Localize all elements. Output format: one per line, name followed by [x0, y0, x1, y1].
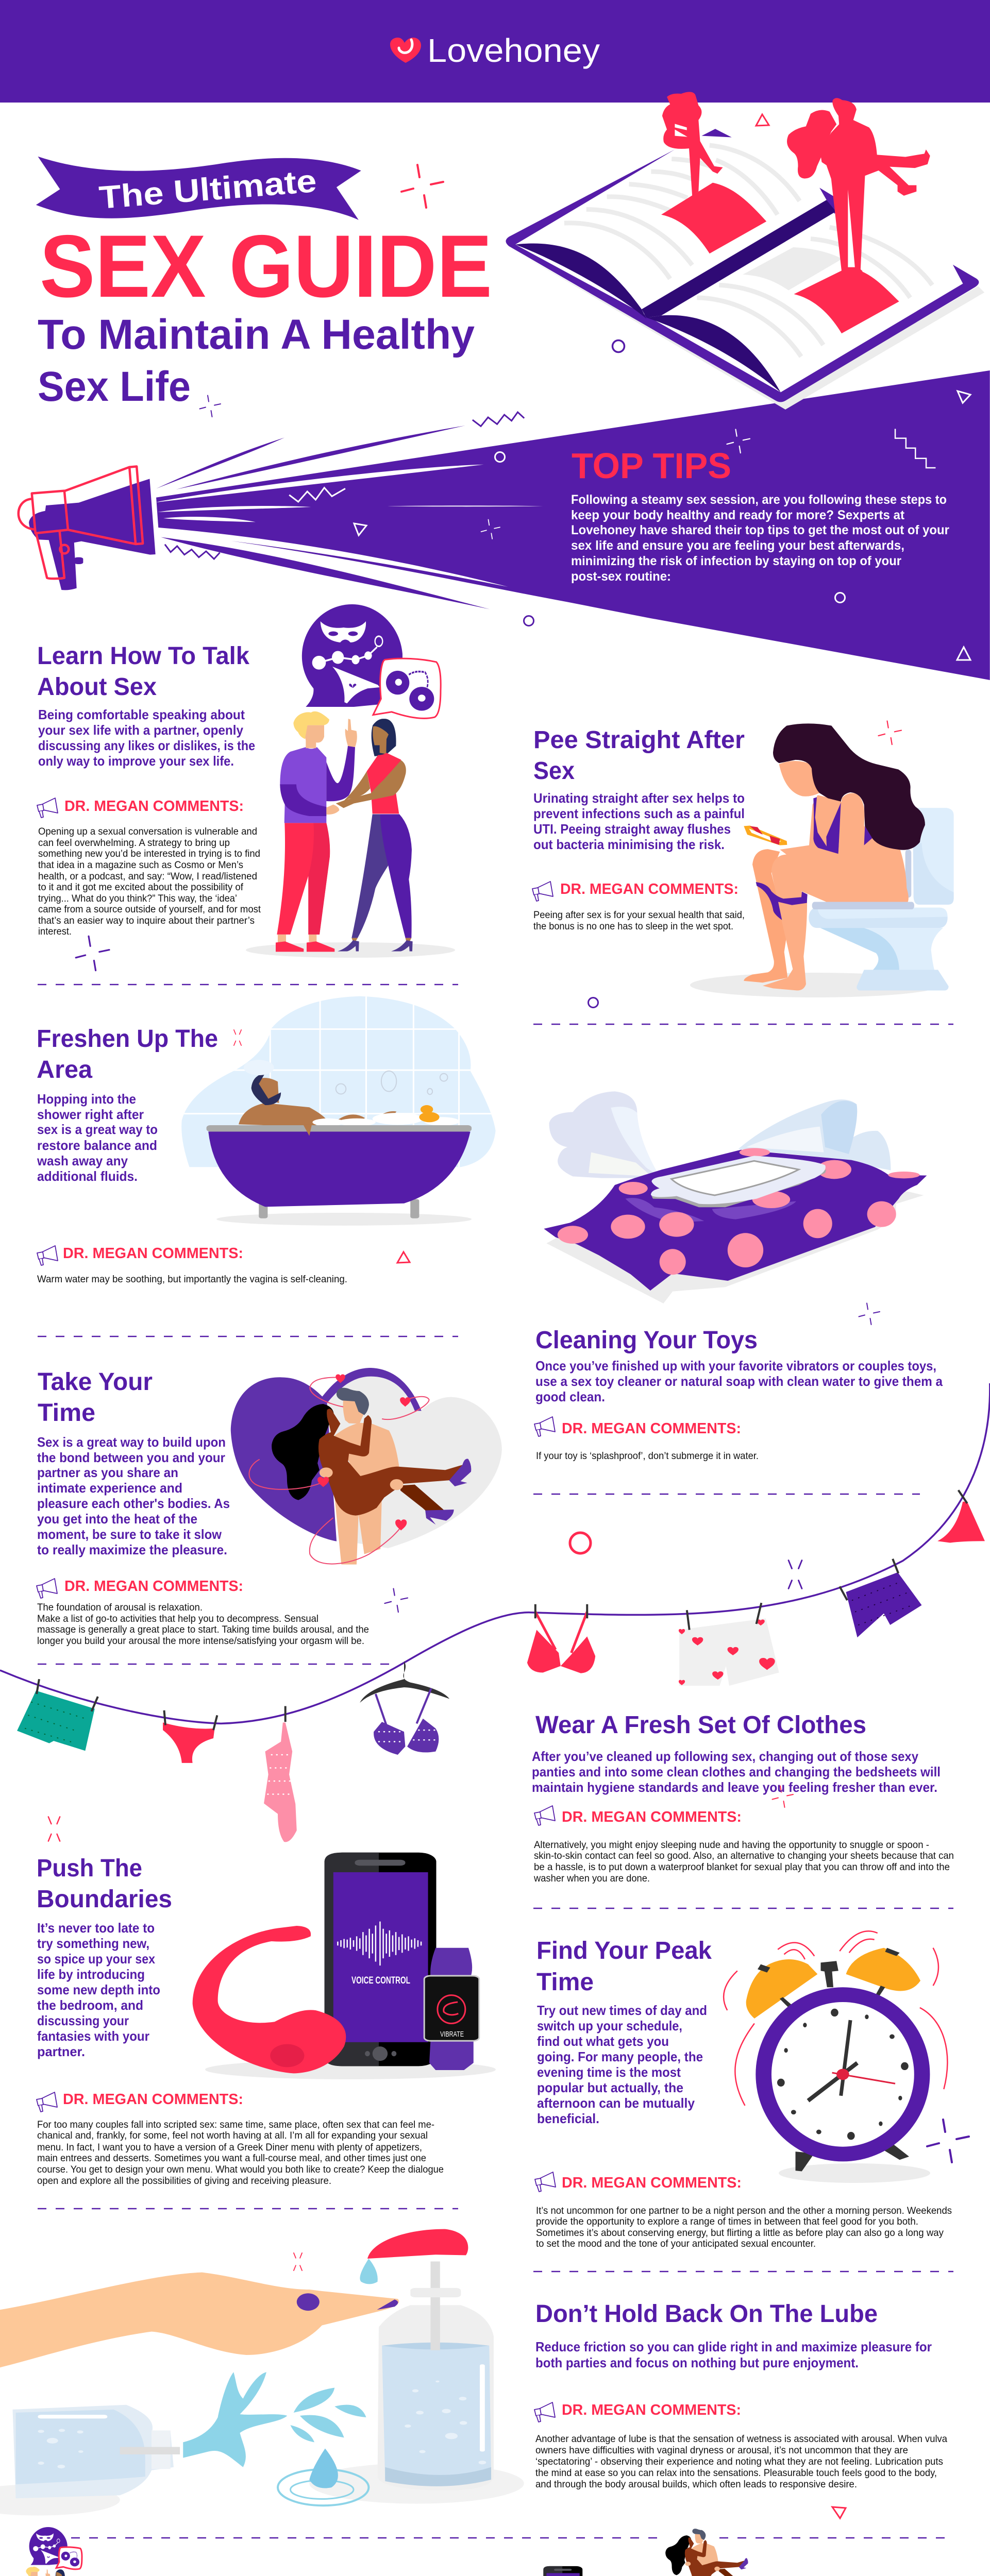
- body text: restore balance and: [37, 1138, 157, 1153]
- body text: good clean.: [535, 1389, 605, 1404]
- body text: [533, 790, 745, 852]
- comment text: It’s not uncommon for one partner to be a night person and the other a morning person. Weekends: [536, 2205, 952, 2216]
- bells: [746, 1948, 920, 2019]
- body text: Try out new times of day and: [537, 2003, 707, 2018]
- illustration: man in bathtub: [207, 1060, 472, 1218]
- body text: pleasure each other's bodies. As: [37, 1496, 230, 1511]
- body text: some new depth into: [37, 1982, 160, 1997]
- comment text: Make a list of go-to activities that help you to decompress. Sensual: [37, 1613, 318, 1624]
- body text: Being comfortable speaking about: [38, 707, 245, 722]
- sparkle: [859, 1303, 880, 1325]
- dr megan comments heading: DR. MEGAN COMMENTS:: [562, 2402, 741, 2418]
- illustration: talking couple: [276, 604, 441, 952]
- body text: you get into the heat of the: [37, 1511, 197, 1527]
- comment text: [38, 826, 261, 937]
- illustration: alarm clock: [724, 1931, 947, 2172]
- heading: Cleaning Your Toys: [535, 1327, 758, 1354]
- fallen bottle: [12, 2405, 180, 2498]
- teal shorts: [17, 1679, 98, 1751]
- body text: UTI. Peeing straight away flushes: [533, 821, 731, 837]
- red panty: [163, 1710, 217, 1763]
- ribbon banner: [36, 157, 361, 220]
- washing line: [0, 1383, 990, 1723]
- phone: [325, 1853, 436, 2066]
- clock hands: [808, 2020, 895, 2100]
- subtitle line 2: Sex Life: [38, 363, 191, 410]
- comment text: Opening up a sexual conversation is vulnerable and: [38, 826, 257, 837]
- red threads with hearts: [249, 1375, 429, 1564]
- comment text: ‘spectatoring’ - observing their experience and noting what they are not feeling. Lubrication puts: [535, 2456, 943, 2467]
- divider: [38, 1664, 395, 1665]
- body text: [532, 1749, 941, 1795]
- dr megan comments heading: DR. MEGAN COMMENTS:: [562, 2175, 742, 2191]
- heading: Boundaries: [37, 1886, 172, 1913]
- comment text: and through the body arousal builds, which often leads to responsive desire.: [535, 2479, 857, 2490]
- illustration: tiled wall blob: [177, 994, 505, 1226]
- heading: Time: [536, 1969, 594, 1996]
- dr megan comments heading: [37, 2091, 243, 2112]
- body text: partner as you share an: [37, 1465, 178, 1480]
- body text: beneficial.: [537, 2111, 599, 2126]
- divider: [533, 1024, 953, 1025]
- body text: Reduce friction so you can glide right in and maximize pleasure for: [535, 2339, 932, 2354]
- polka dots: [558, 1148, 920, 1275]
- top tips body: post-sex routine:: [571, 569, 671, 584]
- dr megan comments heading: DR. MEGAN COMMENTS:: [64, 798, 244, 815]
- splash: [183, 2372, 366, 2467]
- mini: toy and phone: [497, 2566, 597, 2576]
- comment text: For too many couples fall into scripted sex: same time, same place, often sex that can feel me-: [37, 2119, 434, 2130]
- comment text: interest.: [38, 926, 72, 937]
- comment text: the bonus is no one has to sleep in the wet spot.: [533, 921, 733, 932]
- body text: switch up your schedule,: [537, 2018, 682, 2033]
- body text: life by introducing: [37, 1967, 145, 1982]
- body text: sex is a great way to: [37, 1122, 158, 1137]
- heading: Take Your: [38, 1368, 153, 1396]
- book: [506, 129, 984, 410]
- pack: [544, 1091, 927, 1291]
- body text: popular but actually, the: [537, 2080, 683, 2095]
- divider: [38, 984, 458, 985]
- illustration: hearts background: [231, 1368, 502, 1548]
- body text: It’s never too late to: [37, 1920, 155, 1936]
- comment text: Alternatively, you might enjoy sleeping nude and having the opportunity to snuggle or spoon -: [534, 1839, 929, 1851]
- lid: [651, 1156, 827, 1207]
- body text: use a sex toy cleaner or natural soap with clean water to give them a: [535, 1374, 943, 1389]
- section: cleaning your toys: [534, 1303, 943, 1462]
- header band: [0, 0, 990, 103]
- illustration: wet wipes pack: [544, 1091, 927, 1303]
- body text: discussing your: [37, 2013, 129, 2028]
- dr megan comments heading: DR. MEGAN COMMENTS:: [562, 1809, 742, 1825]
- tick marks: [777, 2009, 909, 2140]
- top tips body: minimizing the risk of infection by staying on top of your: [571, 554, 901, 568]
- comment text: [536, 2205, 952, 2249]
- title block: [36, 157, 492, 410]
- comment text: The foundation of arousal is relaxation.: [37, 1602, 203, 1613]
- foam: [312, 1113, 460, 1126]
- sparkle: [76, 936, 109, 971]
- legs: [796, 2142, 909, 2172]
- heading: [533, 726, 745, 785]
- comment text: [37, 1602, 369, 1647]
- right panty: [937, 1490, 985, 1543]
- comment text: can feel overwhelming. A strategy to bring up: [38, 837, 230, 849]
- droplet and ripples: [278, 2448, 368, 2505]
- ringing arcs: [724, 1931, 947, 2106]
- body text: try something new,: [37, 1936, 149, 1951]
- comment text: menu. In fact, I want you to have a version of a Greek Diner menu with plenty of appetizers,: [37, 2142, 422, 2153]
- comment text: [37, 2119, 444, 2187]
- tissues: [549, 1091, 891, 1178]
- body text: so spice up your sex: [37, 1951, 155, 1967]
- top tips body: Lovehoney have shared their top tips to get the most out of your: [571, 523, 949, 537]
- comment text: washer when you are done.: [533, 1873, 650, 1884]
- body text: only way to improve your sex life.: [38, 753, 234, 769]
- heading: [38, 1368, 153, 1427]
- shadow: [246, 942, 455, 958]
- divider: [38, 1336, 458, 1337]
- heading: Don’t Hold Back On The Lube: [535, 2300, 878, 2328]
- body text: maintain hygiene standards and leave you feeling fresher than ever.: [532, 1780, 937, 1795]
- top tips body: Following a steamy sex session, are you following these steps to: [571, 493, 947, 507]
- comment text: health, or a podcast, and say: “Wow, I read/listened: [38, 871, 257, 882]
- sparkle: [384, 1588, 408, 1612]
- icon: rubber duck: [419, 1105, 440, 1122]
- sparkle: [927, 2120, 969, 2162]
- heading: Time: [38, 1399, 95, 1427]
- dr megan comments heading: [532, 881, 739, 901]
- body text: your sex life with a partner, openly: [38, 722, 244, 738]
- upright pump bottle: [360, 2229, 494, 2490]
- body text: Urinating straight after sex helps to: [533, 790, 745, 806]
- clock body: [756, 1987, 930, 2161]
- decorative marks: [234, 1030, 410, 1263]
- divider: [533, 1494, 920, 1495]
- heading: [37, 1855, 172, 1913]
- body text: Hopping into the: [37, 1091, 136, 1107]
- section: find your peak time: [535, 1931, 969, 2249]
- mini: talking couple: [19, 2527, 82, 2576]
- man: [239, 1060, 396, 1135]
- dr megan comments heading: DR. MEGAN COMMENTS:: [562, 1420, 741, 1437]
- purple bra on hanger: [360, 1661, 449, 1755]
- section: push the boundaries: [37, 1817, 496, 2187]
- comment text: open and explore all the possibilities of giving and receiving pleasure.: [37, 2175, 331, 2187]
- body text: find out what gets you: [537, 2033, 669, 2049]
- top tips heading: TOP TIPS: [572, 446, 731, 486]
- divider: [71, 2537, 946, 2538]
- sparkle: [48, 1817, 60, 1841]
- shadows: [0, 2463, 524, 2516]
- sparkle: [294, 2253, 302, 2270]
- icon: heart logo: [390, 38, 421, 63]
- woman: [744, 723, 925, 991]
- body text: afternoon can be mutually: [537, 2095, 695, 2111]
- comment text: Warm water may be soothing, but importantly the vagina is self-cleaning.: [37, 1274, 347, 1285]
- decorative marks around clothesline: [570, 1533, 802, 1807]
- body text: the bond between you and your: [37, 1450, 225, 1465]
- phone screen label: VOICE CONTROL: [351, 1975, 410, 1986]
- body text: shower right after: [37, 1107, 144, 1122]
- title: the ultimate: The Ultimate: [98, 163, 318, 216]
- man: [276, 711, 357, 952]
- woman: [336, 719, 413, 951]
- comment text: that’s an easier way to inquire about their partner’s: [38, 915, 255, 926]
- divider: [533, 1908, 953, 1909]
- body text: [37, 1920, 160, 2059]
- section: freshen up the area: [37, 994, 505, 1285]
- dr megan comments heading: DR. MEGAN COMMENTS:: [560, 881, 739, 897]
- body text: the bedroom, and: [37, 1997, 143, 2013]
- megaphone beam panel: [19, 370, 990, 680]
- purple shorts: [840, 1559, 921, 1637]
- man: [334, 1388, 399, 1565]
- dr megan comments heading: DR. MEGAN COMMENTS:: [63, 2091, 243, 2108]
- divider: [533, 2271, 953, 2272]
- body text: additional fluids.: [37, 1168, 138, 1184]
- comment text: owners have difficulties with vaginal dryness or arousal, it’s not uncommon that they are: [535, 2445, 908, 2456]
- illustration: embracing couple: [272, 1388, 471, 1565]
- body text: [37, 1434, 230, 1557]
- watch label: VIBRATE: [440, 2030, 464, 2039]
- watch: [424, 1948, 479, 2070]
- body text: [535, 1358, 943, 1404]
- beam: [156, 370, 990, 680]
- comment text: Another advantage of lube is that the sensation of wetness is associated with arousal. When vulva: [535, 2433, 947, 2445]
- red bra: [527, 1604, 595, 1673]
- heading: Push The: [37, 1855, 142, 1882]
- comment text: Sometimes it’s about conserving energy, but flirting a little as before play can also go a long way: [536, 2227, 944, 2239]
- heading: [536, 1937, 712, 1996]
- sparkle and ring: [589, 721, 901, 1008]
- toilet: [809, 808, 954, 991]
- body text: [537, 2003, 707, 2126]
- shadow: [205, 2060, 496, 2079]
- wrapper: [544, 1150, 927, 1291]
- body text: panties and into some clean clothes and changing the bedsheets will: [532, 1764, 941, 1780]
- footer panel: [0, 2527, 990, 2576]
- pink slip: [264, 1706, 297, 1842]
- top tips body: [571, 493, 949, 584]
- heading: Wear A Fresh Set Of Clothes: [535, 1711, 866, 1739]
- heading: [37, 642, 249, 701]
- comment text: course. You get to design your own menu. What would you both like to create? Keep the dialogue: [37, 2164, 444, 2175]
- comment text: [533, 909, 745, 932]
- decorative marks top: [200, 114, 769, 417]
- shadow: [546, 1175, 924, 1303]
- icon: megaphone: [19, 466, 156, 590]
- heading: Find Your Peak: [536, 1937, 712, 1964]
- mini: embracing couple: [665, 2529, 748, 2576]
- comment text: provide the opportunity to explore a range of times in between that feel good for you both.: [536, 2216, 918, 2227]
- top tips body: sex life and ensure you are feeling your best afterwards,: [571, 538, 904, 553]
- comment text: longer you build your arousal the more intense/satisfying your orgasm will be.: [37, 1635, 364, 1647]
- heading: [37, 1025, 218, 1083]
- body text: After you’ve cleaned up following sex, changing out of those sexy: [532, 1749, 918, 1764]
- heading: Learn How To Talk: [37, 642, 249, 670]
- comment text: something new you’d be interested in trying is to find: [38, 848, 260, 859]
- illustration: clothesline: [0, 1383, 990, 1842]
- section: don't hold back on the lube: [534, 2300, 947, 2518]
- shadow: [690, 973, 941, 997]
- triangle: [832, 2507, 846, 2518]
- heading: Sex: [533, 757, 575, 785]
- body text: intimate experience and: [37, 1480, 182, 1496]
- comment text: skin-to-skin contact can feel so good. Also, an alternative to changing your sheets because that can: [534, 1850, 954, 1861]
- heart boxers: [679, 1603, 779, 1686]
- body text: partner.: [37, 2044, 85, 2059]
- dr megan comments heading: DR. MEGAN COMMENTS:: [63, 1245, 243, 1262]
- comment text: to it and it got me excited about the possibility of: [38, 882, 244, 893]
- shadow: [779, 2163, 930, 2183]
- body text: [535, 2339, 932, 2370]
- comment text: massage is generally a great place to start. Taking time builds arousal, and the: [37, 1624, 369, 1635]
- section: wear a fresh set of clothes: [532, 1711, 954, 1884]
- heading: Freshen Up The: [37, 1025, 218, 1053]
- illustration: woman on toilet: [744, 723, 954, 991]
- brand name: Lovehoney: [427, 32, 600, 69]
- toy: [193, 1926, 346, 2073]
- illustration: phone, watch and toy: [193, 1853, 479, 2073]
- bubbles: [336, 1071, 448, 1094]
- comment text: main entrees and desserts. Sometimes you want a full-course meal, and other times just one: [37, 2153, 426, 2164]
- section: pee straight after sex: [532, 721, 954, 1008]
- section: learn how to talk about sex: [37, 604, 455, 971]
- body text: Once you’ve finished up with your favorite vibrators or couples toys,: [535, 1358, 936, 1374]
- heading: About Sex: [37, 673, 157, 701]
- body text: fantasies with your: [37, 2028, 149, 2044]
- hand: [0, 2273, 399, 2367]
- comment text: to set the mood and the tone of your anticipated sexual encounter.: [536, 2238, 816, 2249]
- top tips body: keep your body healthy and ready for more? Sexperts at: [571, 508, 905, 522]
- body text: [38, 707, 255, 769]
- body text: out bacteria minimising the risk.: [533, 837, 725, 852]
- body text: to really maximize the pleasure.: [37, 1542, 227, 1557]
- comment text: [533, 1839, 954, 1884]
- dr megan comments heading: DR. MEGAN COMMENTS:: [64, 1578, 243, 1595]
- body text: discussing any likes or dislikes, is the: [38, 738, 255, 753]
- heading: Pee Straight After: [533, 726, 745, 754]
- fallen bottle and splash: [12, 2372, 366, 2498]
- speech bubble with toys: [302, 604, 441, 718]
- woman: [272, 1404, 471, 1524]
- silhouette: kissing couple left: [662, 92, 723, 196]
- bathtub: [207, 1124, 472, 1218]
- section: take your time: [37, 1368, 502, 1647]
- comment text: trying... What do you think?” This way, the ‘idea’: [38, 893, 237, 904]
- comment text: If your toy is ‘splashproof’, don’t submerge it in water.: [536, 1450, 759, 1462]
- body text: evening time is the most: [537, 2064, 681, 2080]
- body text: [37, 1091, 158, 1184]
- illustration: open book with couples: [506, 92, 984, 410]
- comment text: be a hassle, is to put down a waterproof blanket for sexual play that you can throw off and into the: [534, 1861, 950, 1873]
- comment text: Peeing after sex is for your sexual health that said,: [533, 909, 745, 921]
- comment text: that idea in a magazine such as Cosmo or Men’s: [38, 859, 243, 871]
- illustration: hand, lube bottle and spill: [0, 2229, 524, 2516]
- body text: both parties and focus on nothing but pure enjoyment.: [535, 2355, 859, 2370]
- beam decorations: [354, 391, 970, 660]
- body text: moment, be sure to take it slow: [37, 1527, 222, 1542]
- comment text: [535, 2433, 947, 2490]
- divider: [38, 2208, 458, 2209]
- subtitle line 1: To Maintain A Healthy: [38, 311, 475, 358]
- comment text: chanical and, frankly, for some, feel not worth having at all. I’m all for expanding your sexual: [37, 2130, 428, 2141]
- comment text: the mind at ease so you can relax into the sensations. Pleasurable touch feels good to the body,: [535, 2467, 937, 2479]
- body text: Sex is a great way to build upon: [37, 1434, 226, 1450]
- body text: prevent infections such as a painful: [533, 806, 745, 821]
- silhouette: man carrying woman: [787, 98, 930, 272]
- comment text: came from a source outside of yourself, and for most: [38, 904, 261, 915]
- heading: Area: [37, 1056, 92, 1083]
- body text: going. For many people, the: [537, 2049, 703, 2064]
- body text: wash away any: [37, 1153, 128, 1168]
- title: sex guide: SEX GUIDE: [40, 217, 492, 316]
